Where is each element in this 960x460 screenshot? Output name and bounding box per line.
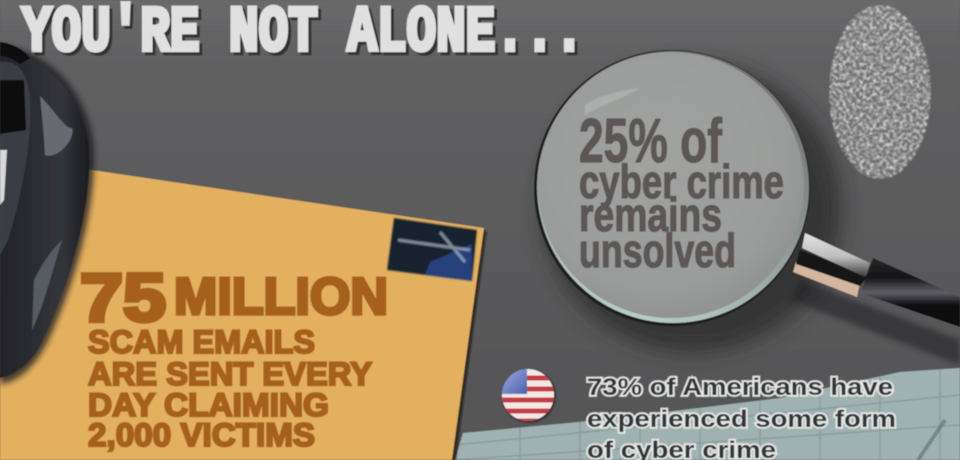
Americans statistic: 73% of Americans have [587, 374, 893, 401]
icon: US flag [500, 368, 556, 424]
Americans statistic [587, 374, 896, 460]
envelope text: 2,000 VICTIMS [88, 417, 315, 453]
handle [793, 233, 960, 327]
lens text: remains [579, 188, 722, 241]
computer mouse [0, 42, 94, 384]
lens text: 25% of [579, 107, 722, 176]
title: YOU'RE NOT ALONE... [25, 1, 587, 73]
envelope [0, 169, 487, 460]
fingerprint [829, 5, 931, 179]
envelope text: ARE SENT EVERY [88, 356, 372, 392]
envelope text: SCAM EMAILS [88, 324, 315, 360]
lens text: cyber crime [579, 155, 784, 208]
lens text: unsolved [579, 224, 736, 277]
magnifying glass [534, 50, 960, 365]
envelope text: 75 [80, 260, 166, 336]
envelope text: DAY CLAIMING [88, 387, 329, 423]
Americans statistic: experienced some form [587, 406, 896, 433]
Americans statistic: experienced some form [587, 406, 896, 433]
paper map [455, 360, 960, 460]
title: YOU'RE NOT ALONE... [22, 0, 584, 70]
lens text [579, 107, 784, 277]
stamp [387, 218, 477, 281]
envelope text: MILLION [174, 268, 388, 326]
Americans statistic: 73% of Americans have [587, 374, 893, 401]
envelope text [80, 260, 388, 453]
